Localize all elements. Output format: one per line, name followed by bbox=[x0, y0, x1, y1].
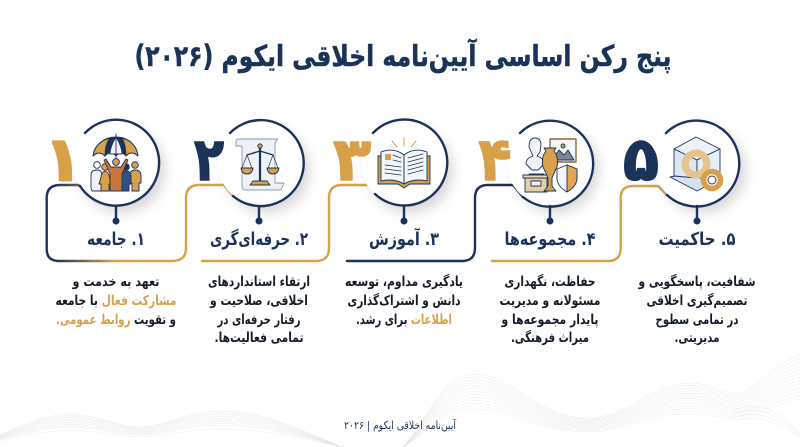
icon: open book bbox=[378, 138, 430, 188]
pillar 4: collections bbox=[478, 120, 667, 346]
circle ring 3 bbox=[373, 120, 447, 206]
description 3: یادگیری مداوم، توسعه bbox=[345, 273, 463, 290]
number 2: ۲ bbox=[194, 125, 224, 195]
description 2 bbox=[208, 274, 310, 346]
description 2: رفتار حرفه‌ای در bbox=[217, 312, 300, 328]
description 4: میراث فرهنگی. bbox=[511, 329, 589, 346]
pillar 1: community bbox=[45, 120, 233, 328]
heading 2: ۲. حرفه‌ای‌گری bbox=[210, 228, 308, 250]
description 4: پایدار مجموعه‌ها و bbox=[501, 312, 598, 328]
pillar 5: governance bbox=[623, 120, 756, 346]
decorative wave background bbox=[0, 352, 800, 447]
stem and dot 2 bbox=[256, 206, 262, 224]
description 3 bbox=[345, 273, 463, 328]
number 4: ۴ bbox=[478, 125, 512, 195]
connector frame 2 bbox=[202, 185, 376, 261]
title: پنج رکن اساسی آیین‌نامه اخلاقی ایکوم (۲۰۲۶) bbox=[135, 38, 672, 74]
description 4: حفاظت، نگهداری bbox=[504, 273, 596, 290]
description 5: در تمامی سطوح bbox=[656, 312, 739, 328]
number 1: ۱ bbox=[45, 125, 81, 195]
stem and dot 3 bbox=[400, 206, 408, 224]
circle ring 1 bbox=[80, 120, 159, 206]
description 5: مدیریتی. bbox=[674, 330, 720, 346]
stem and dot 1 bbox=[112, 206, 120, 224]
connector frame 4 bbox=[492, 186, 667, 261]
stem and dot 4 bbox=[546, 206, 554, 224]
description 4 bbox=[500, 273, 600, 346]
icon: umbrella and people bbox=[91, 134, 141, 191]
description 1: و تقویت روابط عمومی. bbox=[56, 312, 176, 328]
description 1: تعهد به خدمت و bbox=[72, 274, 160, 290]
icon: bust, vase, picture and shield bbox=[523, 138, 577, 192]
pillar 2: professionalism bbox=[194, 120, 376, 346]
heading 4: ۴. مجموعه‌ها bbox=[504, 229, 596, 250]
heading 1: ۱. جامعه bbox=[87, 229, 145, 250]
description 2: تمامی فعالیت‌ها. bbox=[214, 330, 304, 346]
pillar 3: education bbox=[333, 120, 523, 328]
stem and dot 5 bbox=[694, 206, 700, 224]
description 2: ارتقاء استانداردهای bbox=[208, 274, 310, 290]
number 5: ۵ bbox=[623, 125, 659, 195]
description 2: اخلاقی، صلاحیت و bbox=[209, 293, 308, 309]
description 3: اطلاعات برای رشد. bbox=[356, 312, 452, 328]
circle ring 4 bbox=[520, 121, 593, 207]
number 3: ۳ bbox=[333, 125, 371, 195]
icon: scales of justice on scroll bbox=[236, 139, 284, 190]
connector frame 1 bbox=[47, 185, 233, 261]
description 5 bbox=[638, 273, 756, 346]
description 4: مسئولانه و مدیریت bbox=[500, 293, 600, 309]
description 5: تصمیم‌گیری اخلاقی bbox=[646, 292, 748, 309]
description 5: شفافیت، پاسخگویی و bbox=[638, 273, 756, 290]
circle ring 2 bbox=[230, 120, 304, 206]
description 1 bbox=[56, 274, 176, 328]
icon: glass cube with gears bbox=[670, 137, 722, 191]
description 3: دانش و اشتراک‌گذاری bbox=[348, 292, 461, 309]
circle ring 5 bbox=[666, 121, 739, 207]
connector frame 3 bbox=[347, 185, 523, 261]
heading 5: ۵. حاکمیت bbox=[658, 229, 736, 250]
footer: آیین‌نامه اخلاقی ایکوم | ۲۰۲۶ bbox=[344, 418, 457, 432]
heading 3: ۳. آموزش bbox=[369, 227, 439, 250]
description 1: مشارکت فعال با جامعه bbox=[56, 293, 176, 309]
